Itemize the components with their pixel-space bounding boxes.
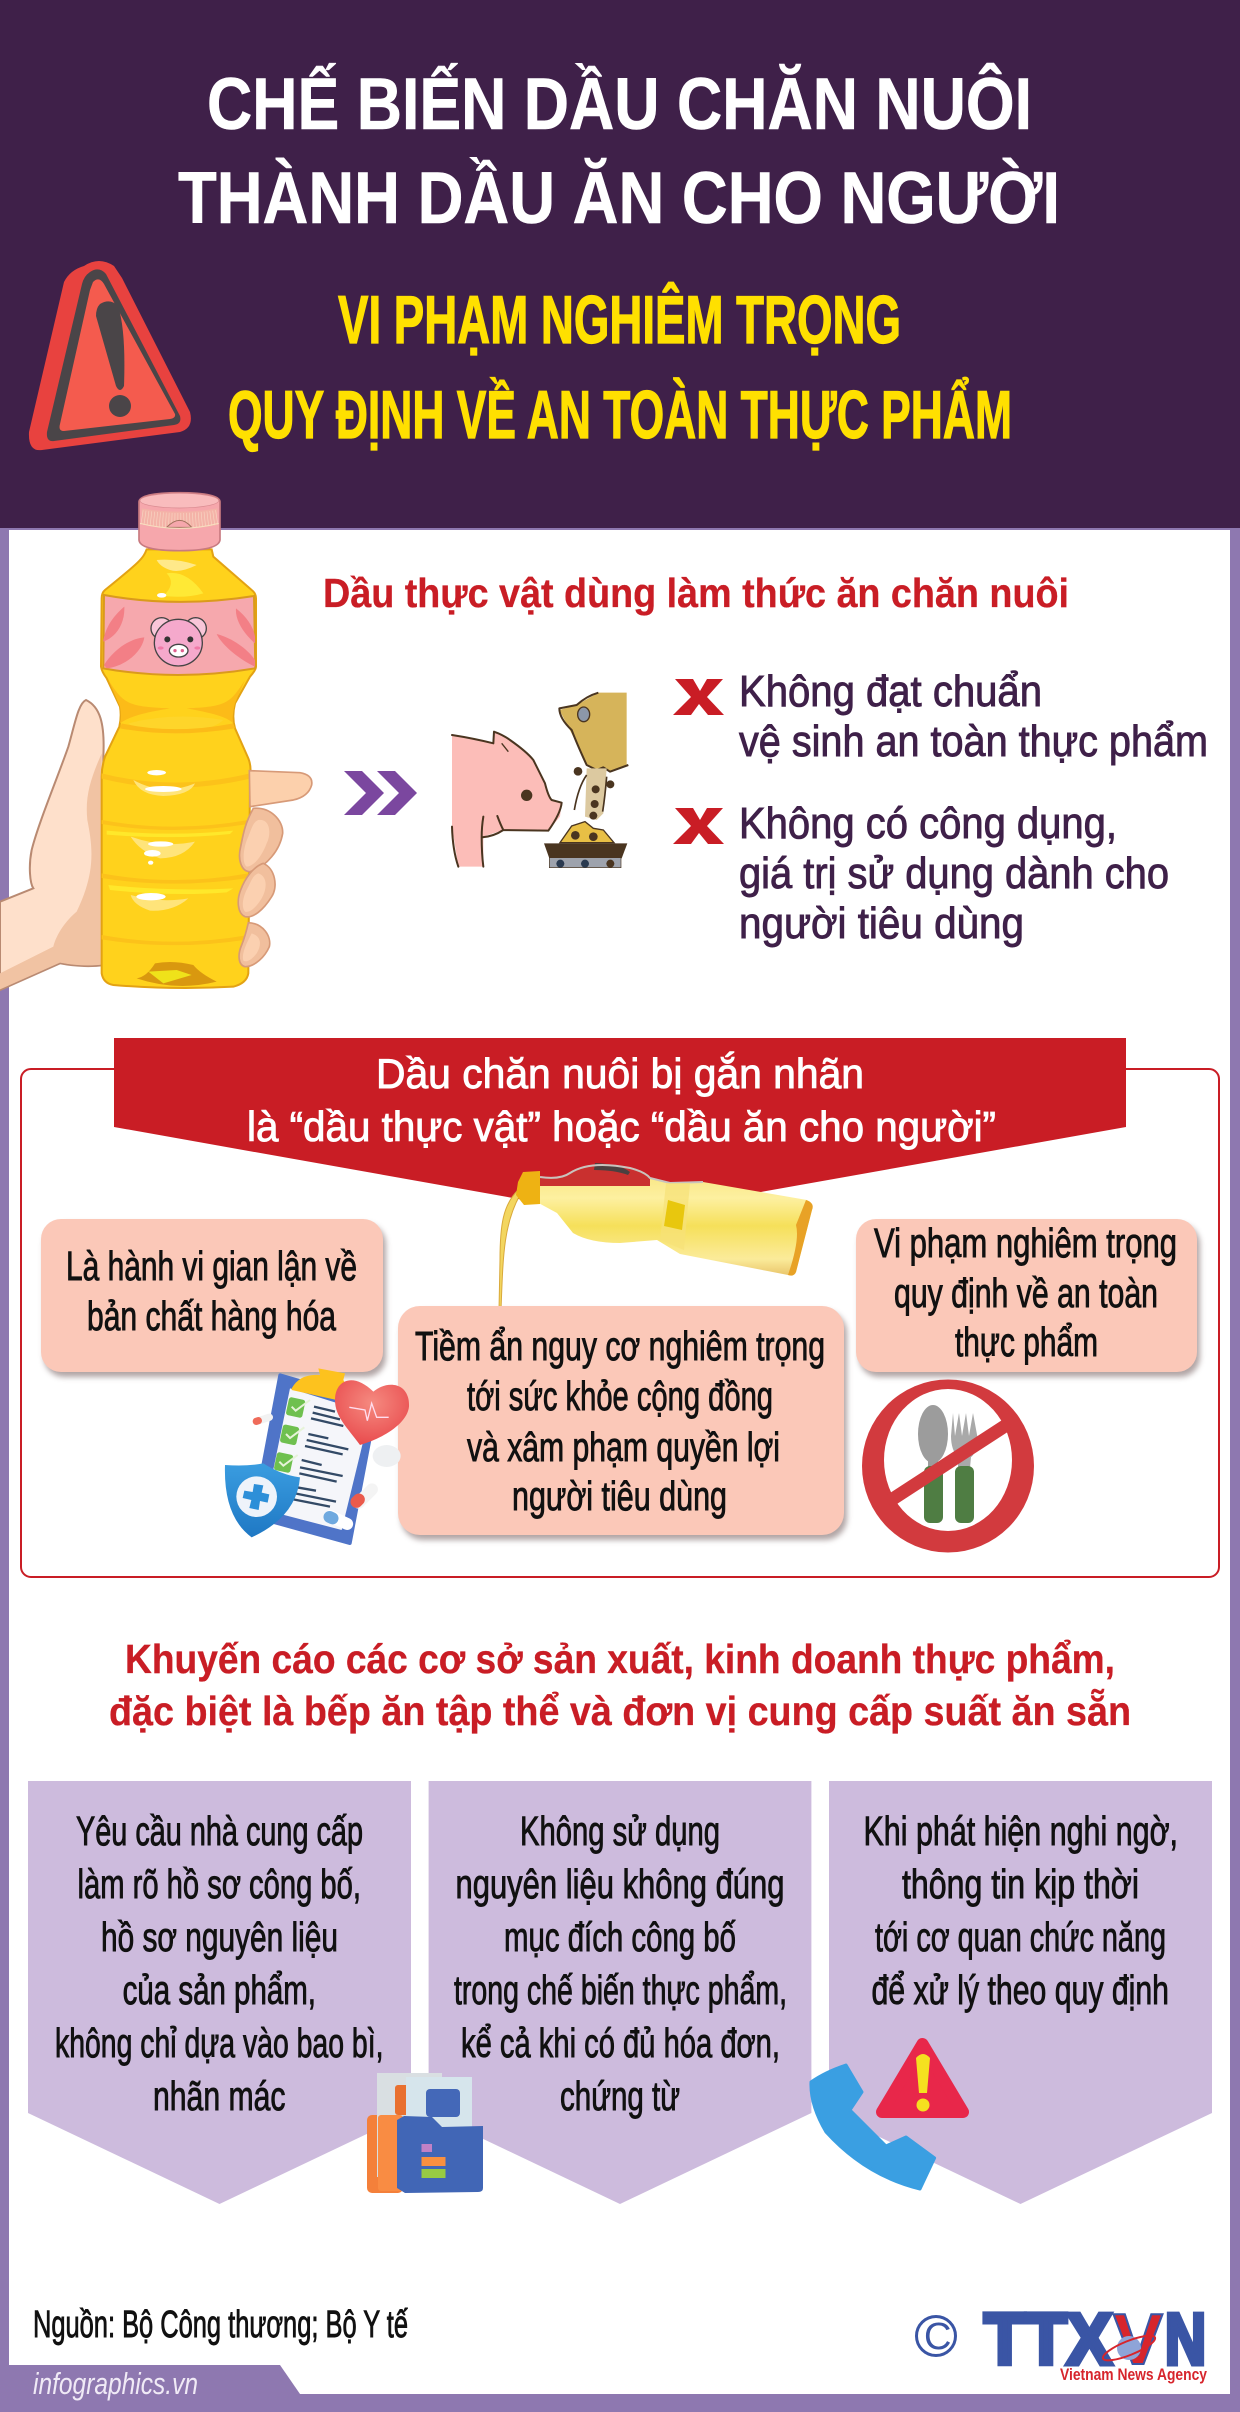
text: no use value: giá trị sử dụng dành cho <box>739 849 1169 898</box>
panel: mislabelled oil <box>21 1038 1219 1577</box>
panel: report suspicions <box>829 1781 1212 2204</box>
callout: fraud: bản chất hàng hóa <box>87 1293 336 1339</box>
X mark 2 <box>673 808 724 844</box>
callout: serious health risk <box>398 1306 844 1535</box>
icon: health checklist <box>225 1368 409 1543</box>
callout: fraud: Là hành vi gian lận về <box>66 1243 357 1289</box>
X mark 1 <box>673 679 724 715</box>
bottle label with pig face <box>103 595 255 675</box>
icon: telephone <box>811 2065 935 2189</box>
text: no use value <box>739 799 1169 948</box>
header band <box>0 0 1240 530</box>
callout: serious health risk: tới sức khỏe cộng đồng <box>467 1373 773 1419</box>
copyright mark: C <box>924 2316 951 2358</box>
panel: do not misuse raw materials: Không sử dụng <box>520 1808 720 1854</box>
footer tab: website: infographics.vn <box>33 2366 198 2401</box>
panel: supplier documents: làm rõ hồ sơ công bố, <box>78 1861 361 1907</box>
icon: no food sign <box>862 1380 1034 1552</box>
panel: do not misuse raw materials <box>429 1781 811 2204</box>
subtitle: VI PHẠM NGHIÊM TRỌNG <box>338 281 901 358</box>
panel: do not misuse raw materials: kể cả khi có đủ hóa đơn, <box>461 2020 780 2066</box>
panel: do not misuse raw materials: trong chế biến thực phẩm, <box>454 1967 787 2013</box>
arrow: double chevron <box>344 771 417 815</box>
text: no use value: người tiêu dùng <box>739 899 1024 948</box>
callout: serious health risk: người tiêu dùng <box>512 1473 727 1519</box>
logo: TTXVN: V <box>1113 2300 1163 2380</box>
page frame <box>0 528 1240 2412</box>
section heading: feed oil: Dầu thực vật dùng làm thức ăn chăn nuôi <box>323 570 1069 616</box>
icon: alert triangle <box>882 2044 963 2112</box>
section heading: recommendation <box>109 1636 1131 1734</box>
icon: warning triangle <box>29 261 191 450</box>
logo: TTXVN: Vietnam News Agency <box>1060 2365 1207 2384</box>
panel: supplier documents: Yêu cầu nhà cung cấp <box>76 1808 363 1854</box>
banner: Dầu chăn nuôi bị gắn nhãn <box>376 1050 864 1097</box>
text: no use value: Không có công dụng, <box>739 799 1117 848</box>
callout: fraud <box>41 1219 383 1372</box>
title: THÀNH DẦU ĂN CHO NGƯỜI <box>178 158 1060 239</box>
callout: serious health risk: Tiềm ẩn nguy cơ nghiêm trọng <box>415 1323 825 1369</box>
source line: Nguồn: Bộ Công thương; Bộ Y tế <box>33 2304 408 2346</box>
bottle held by hand <box>0 493 312 990</box>
panel: supplier documents <box>28 1781 411 2204</box>
panel: supplier documents: của sản phẩm, <box>123 1967 316 2013</box>
subtitle <box>228 281 1012 453</box>
title: CHẾ BIẾN DẦU CHĂN NUÔI <box>207 64 1032 145</box>
logo: TTXVN: N <box>1165 2300 1206 2380</box>
icon: folder with documents <box>367 2073 483 2193</box>
panel: supplier documents: không chỉ dựa vào bao bì, <box>55 2020 384 2066</box>
banner: là “dầu thực vật” hoặc “dầu ăn cho người” <box>247 1103 996 1150</box>
panel: supplier documents: nhãn mác <box>153 2073 286 2119</box>
hand: thumb and palm <box>0 700 104 990</box>
icon: pig face <box>151 618 206 666</box>
callout: food safety violation: thực phẩm <box>955 1319 1098 1365</box>
panel: do not misuse raw materials: chứng từ <box>560 2073 680 2119</box>
section heading: recommendation: đặc biệt là bếp ăn tập thể và đơn vị cung cấp suất ăn sẵn <box>109 1687 1131 1734</box>
icon: pig eating feed <box>452 693 628 868</box>
hand: fingers <box>238 771 312 967</box>
bottle cap <box>139 493 220 551</box>
text: not up to standard: Không đạt chuẩn <box>739 667 1042 716</box>
panel: supplier documents: hồ sơ nguyên liệu <box>101 1914 338 1960</box>
title <box>178 64 1060 239</box>
oil bottle <box>101 549 256 988</box>
section heading: recommendation: Khuyến cáo các cơ sở sản xuất, kinh doanh thực phẩm, <box>125 1636 1115 1682</box>
logo: TTXVN: TTX <box>984 2300 1112 2380</box>
panel: do not misuse raw materials: mục đích công bố <box>504 1914 736 1960</box>
text: not up to standard <box>739 667 1208 766</box>
panel: do not misuse raw materials: nguyên liệu không đúng <box>456 1861 784 1907</box>
panel: report suspicions: thông tin kịp thời <box>902 1861 1139 1907</box>
logo: TTXVN <box>984 2300 1207 2384</box>
illustration: pouring oil bottle <box>499 1163 813 1310</box>
callout: serious health risk: và xâm phạm quyền lợi <box>467 1424 780 1470</box>
callout: food safety violation <box>856 1219 1197 1372</box>
banner <box>114 1038 1126 1217</box>
footer tab: website <box>0 2365 300 2412</box>
